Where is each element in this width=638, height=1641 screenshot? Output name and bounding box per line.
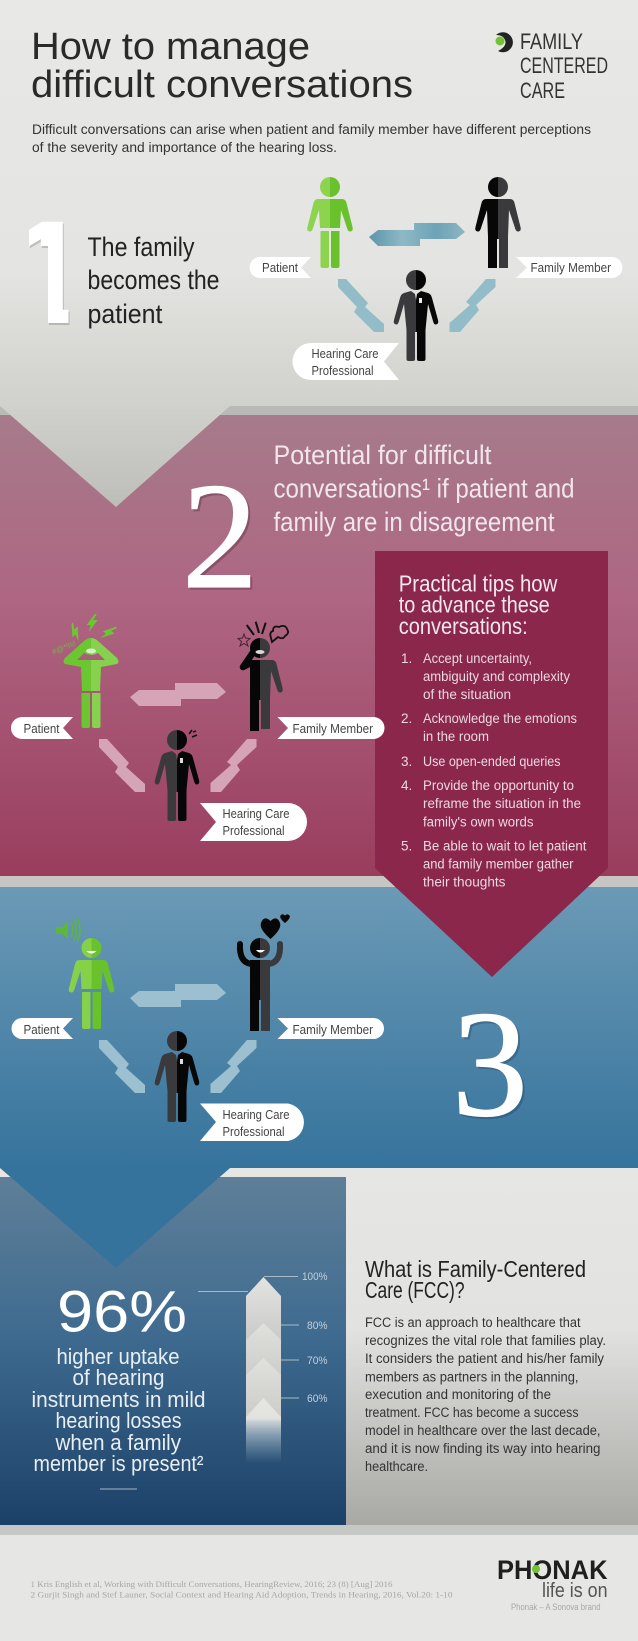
icon: hearts	[261, 914, 290, 939]
text block: tips list: and family member gather	[423, 856, 574, 872]
panel: statistic background	[0, 1177, 346, 1525]
heading: potential for difficult conversations: Potential for difficult	[274, 440, 492, 470]
number 1: 1	[4, 189, 93, 357]
arrow: family member and professional	[210, 739, 256, 792]
panel: footer background	[0, 1535, 638, 1641]
text block: tips list: 1.	[401, 651, 412, 666]
text block: FCC description: and it is now finding its way into hearing	[365, 1441, 600, 1456]
icon: stressed patient	[64, 638, 118, 728]
panel: section 3 background	[0, 887, 638, 1168]
icon: angry family member	[243, 638, 283, 731]
heading: potential for difficult conversations	[274, 440, 574, 537]
text block: tips list: reframe the situation in the	[423, 796, 581, 811]
text block: FCC description: healthcare.	[365, 1459, 428, 1474]
text block: tips list: 2.	[401, 711, 412, 726]
panel: section 2 background	[0, 415, 638, 876]
text block: tips list: 4.	[401, 778, 412, 793]
heading: the family becomes the patient: The family	[88, 232, 195, 262]
text block: statistic description: when a family	[55, 1430, 181, 1455]
text block: FCC description: FCC is an approach to healthcare that	[365, 1315, 581, 1330]
label: hearing care professional	[200, 1104, 304, 1141]
icon: black family member	[475, 177, 521, 268]
text block: FCC description: members as partners in the planning,	[365, 1370, 578, 1384]
chart labels: percentages: 100%	[302, 1271, 328, 1283]
label: family member	[516, 257, 622, 278]
text block: FCC description	[365, 1315, 606, 1474]
icon: stress bolts: #@*%!	[50, 639, 77, 657]
icon: happy family member	[240, 938, 280, 1031]
label: family member	[278, 1018, 384, 1039]
text block: statistic description: instruments in mild	[32, 1387, 206, 1412]
text block: tips list: in the room	[423, 729, 489, 744]
text block: FCC description: model in healthcare over the last decade,	[365, 1423, 600, 1438]
label: family member: Family Member	[292, 721, 374, 736]
text block: tips list: Be able to wait to let patient	[423, 838, 587, 854]
label: hearing care professional: Hearing Care	[222, 1107, 290, 1122]
text block: tips list: Accept uncertainty,	[423, 651, 532, 666]
heading: the family becomes the patient: patient	[88, 299, 163, 329]
logo: phonak: Phonak – A Sonova brand	[511, 1602, 600, 1612]
heading: family centered care: CARE	[520, 78, 565, 103]
text block: introduction: of the severity and importance of the hearing loss.	[32, 140, 337, 155]
label: patient	[11, 717, 73, 739]
icon: surprised professional	[155, 730, 199, 821]
panel: practical tips	[375, 551, 608, 977]
text block: statistic description: of hearing	[72, 1365, 164, 1390]
heading: practical tips: Practical tips how	[399, 570, 558, 596]
label: hearing care professional	[293, 343, 399, 380]
title: difficult conversations	[31, 64, 413, 106]
text block: references: 1 Kris English et al, Working with Difficult Conversations, HearingReview, 2016; 23 (8) [Aug] 2016	[30, 1579, 392, 1589]
text block: tips list	[401, 651, 587, 890]
title	[31, 26, 413, 106]
chart: percentage arrow	[100, 1271, 328, 1489]
statistic: 96 percent: 96%	[57, 1280, 187, 1344]
heading: potential for difficult conversations: conversations¹ if patient and	[274, 474, 574, 504]
text block: FCC description: It considers the patient and his/her family	[365, 1351, 604, 1366]
divider band above section 3	[0, 876, 638, 887]
label: patient	[12, 1018, 73, 1039]
text block: tips list: family's own words	[423, 814, 534, 830]
chart labels: percentages	[302, 1271, 328, 1405]
icon: speaker	[56, 918, 80, 942]
arrow: patient and professional	[338, 279, 384, 332]
text block: tips list: ambiguity and complexity	[423, 669, 570, 684]
text block: tips list: Use open-ended queries	[423, 754, 561, 769]
heading: what is family-centered care: Care (FCC)?	[365, 1277, 464, 1303]
heading: potential for difficult conversations: family are in disagreement	[274, 507, 555, 537]
heading: family centered care	[520, 29, 608, 103]
label: family member: Family Member	[292, 1022, 374, 1037]
heading: the family becomes the patient	[88, 232, 220, 329]
text block: FCC description: recognizes the vital role that families play.	[365, 1333, 606, 1348]
text block: introduction: Difficult conversations can arise when patient and family member have different perceptions	[32, 122, 591, 137]
heading: practical tips: conversations:	[399, 613, 528, 639]
icon: hearing care professional	[394, 270, 438, 361]
label: hearing care professional: Professional	[222, 1124, 285, 1139]
arrow: section 3 chevron	[0, 1168, 230, 1268]
diagram: section 2 disagreement	[11, 614, 385, 841]
chart labels: percentages: 60%	[307, 1393, 328, 1405]
label: patient	[250, 257, 311, 278]
text block: tips list: their thoughts	[423, 874, 506, 890]
icon: green patient	[307, 177, 353, 268]
text block: statistic description: higher uptake	[56, 1344, 180, 1369]
heading: what is family-centered care: What is Family-Centered	[365, 1256, 586, 1282]
label: hearing care professional: Hearing Care	[222, 806, 290, 821]
heading: what is family-centered care	[365, 1256, 586, 1303]
label: patient: Patient	[24, 1022, 60, 1037]
text block: tips list: of the situation	[423, 687, 511, 702]
diagram: section 3 agreement	[12, 914, 384, 1141]
icon: hearing care professional	[155, 1031, 199, 1122]
number 3: 3	[452, 980, 528, 1148]
chart labels: percentages: 80%	[307, 1320, 328, 1332]
text block: references	[30, 1579, 452, 1600]
text block: tips list: 3.	[401, 754, 412, 769]
arrow: patient and family member	[369, 223, 465, 246]
text block: FCC description: execution and monitoring of the	[365, 1387, 551, 1402]
divider band above section 2	[0, 406, 638, 415]
arrow: patient and professional	[99, 1040, 145, 1093]
number 2: 2	[182, 452, 258, 620]
arrow: patient and professional	[99, 739, 145, 792]
logo: phonak: life is on	[542, 1580, 608, 1602]
heading: family centered care: CENTERED	[520, 53, 608, 78]
icon: anger marks	[238, 622, 288, 646]
arrow: section 1 chevron	[0, 406, 230, 507]
label: hearing care professional	[200, 803, 307, 841]
text block: statistic description	[32, 1344, 206, 1476]
icon: happy patient	[69, 938, 114, 1029]
text block: FCC description: treatment. FCC has become a success	[365, 1405, 579, 1420]
icon: stress bolts	[50, 614, 118, 657]
divider band above footer	[0, 1525, 638, 1535]
arrow: family member and professional	[450, 279, 496, 332]
arrow: patient and family member	[130, 984, 226, 1007]
label: hearing care professional: Professional	[312, 363, 374, 378]
label: patient: Patient	[24, 721, 60, 736]
heading: the family becomes the patient: becomes the	[88, 265, 220, 295]
heading: practical tips: to advance these	[399, 592, 550, 618]
text block: references: 2 Gurjit Singh and Stef Launer, Social Context and Hearing Aid Adoption, Trends in Hearing, 2016, Vol.20: 1-10	[30, 1590, 452, 1600]
label: hearing care professional: Professional	[222, 823, 285, 838]
text block: tips list: Provide the opportunity to	[423, 778, 574, 793]
diagram: section 1 relationships	[250, 177, 623, 380]
text block: statistic description: hearing losses	[56, 1408, 182, 1433]
arrow: family member and professional	[210, 1040, 256, 1093]
label: hearing care professional: Hearing Care	[312, 346, 378, 361]
text block: statistic description: member is present²	[34, 1451, 204, 1476]
chart labels: percentages: 70%	[307, 1355, 328, 1367]
label: family member	[278, 717, 385, 739]
logo: phonak: PHONAK	[497, 1555, 608, 1585]
panel: section 1 background	[0, 0, 638, 415]
text block: tips list: Acknowledge the emotions	[423, 711, 577, 726]
label: patient: Patient	[262, 260, 298, 275]
logo: phonak	[497, 1555, 608, 1612]
heading: family centered care: FAMILY	[520, 29, 583, 54]
arrow: patient and family member	[130, 683, 226, 706]
label: family member: Family Member	[530, 260, 612, 275]
panel: FCC explanation background	[0, 1168, 638, 1525]
title: How to manage	[31, 26, 310, 68]
text block: tips list: 5.	[401, 838, 412, 854]
heading: practical tips	[399, 570, 558, 639]
icon: family centered care logo	[496, 32, 513, 52]
text block: introduction	[32, 122, 591, 155]
